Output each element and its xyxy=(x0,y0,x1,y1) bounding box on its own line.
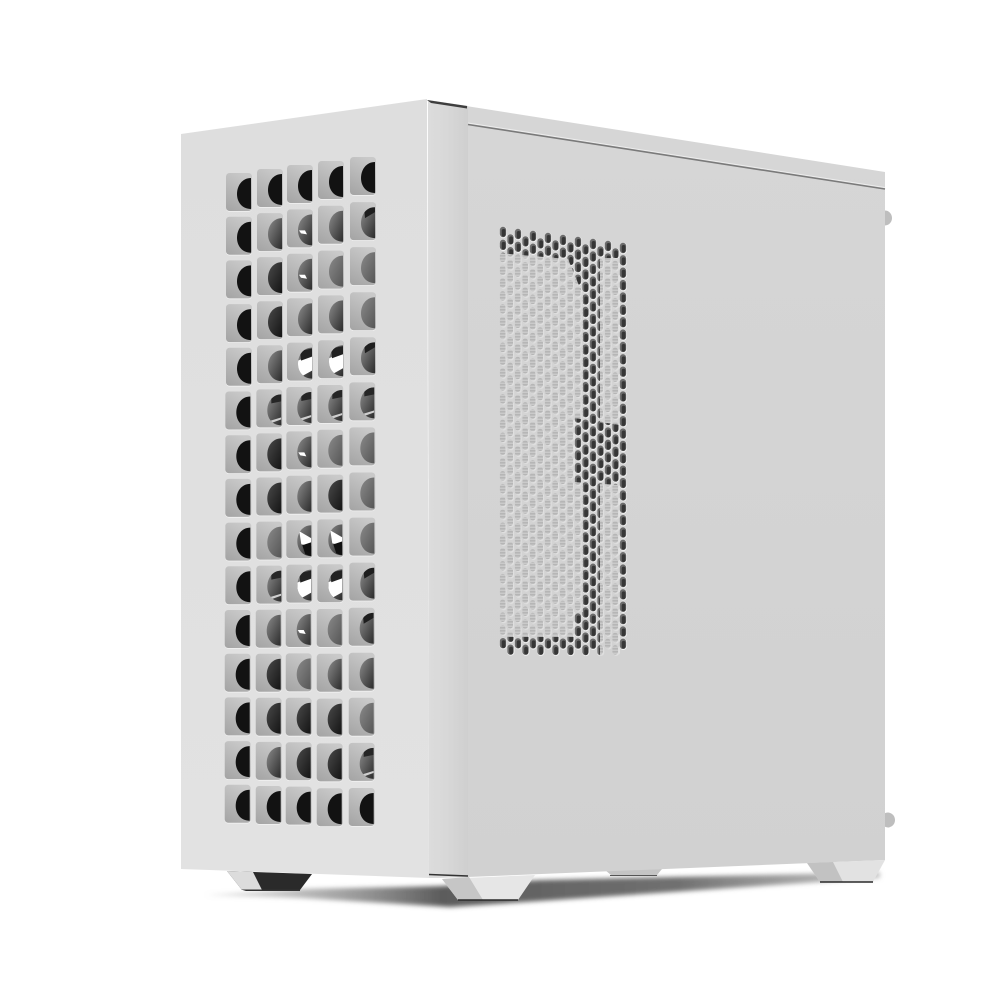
front panel ventilation grid xyxy=(225,157,376,827)
left front foot xyxy=(227,871,312,891)
grid rows 6 to 10 xyxy=(225,382,375,605)
grid rows 1 to 5 xyxy=(226,157,376,387)
front panel xyxy=(181,99,429,878)
center front foot xyxy=(442,875,535,900)
honeycomb vent on side panel xyxy=(503,230,624,655)
bottom lip shadow line xyxy=(429,874,468,876)
dark hexagon holes xyxy=(503,230,624,655)
rear rubber foot xyxy=(605,869,662,876)
top lip shadow xyxy=(427,100,467,108)
grid rows 11 to 15 xyxy=(225,608,375,827)
right side screw bumps xyxy=(878,210,895,828)
side edge strip xyxy=(428,100,468,878)
floor shadow xyxy=(205,872,880,907)
right rear foot xyxy=(807,860,885,882)
side panel of the case xyxy=(428,100,885,878)
light hexagon holes xyxy=(503,230,624,655)
side panel top seam xyxy=(468,123,885,189)
